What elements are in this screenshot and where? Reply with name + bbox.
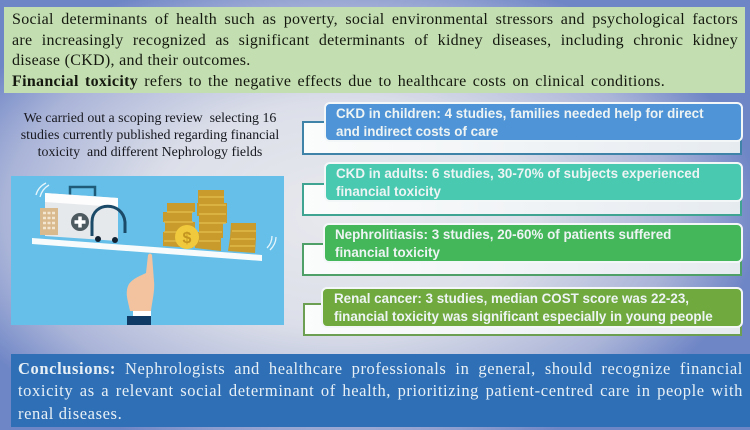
introduction text: are increasingly recognized as significant determinants of kidney diseases, including chronic kidney xyxy=(12,32,738,49)
finding: Renal cancer: Renal cancer: 3 studies, median COST score was 22-23, xyxy=(334,291,689,306)
finding: Renal cancer xyxy=(303,287,743,336)
finding: Renal cancer: financial toxicity was significant especially in young people xyxy=(334,309,713,324)
text: scoping review: toxicity and different Nephrology fields xyxy=(38,145,262,160)
text: scoping review: We carried out a scoping review selecting 16 xyxy=(24,111,276,126)
introduction text: Social determinants of health such as poverty, social environmental stressors and psychological factors xyxy=(12,11,738,28)
icon: coin stacks: $ xyxy=(183,230,192,247)
icon: seesaw plank xyxy=(32,238,262,261)
panel: findings xyxy=(302,102,743,336)
illustration: balance of medical kit and coins xyxy=(11,176,284,325)
text: scoping review: studies currently published regarding financial xyxy=(21,128,279,143)
introduction text: disease (CKD), and their outcomes. xyxy=(12,52,251,69)
text: scoping review xyxy=(21,111,279,160)
finding: Nephrolitiasis xyxy=(302,223,743,276)
conclusions text: renal diseases. xyxy=(18,404,122,423)
introduction text xyxy=(12,11,738,90)
finding: CKD in adults xyxy=(302,162,743,216)
conclusions text: Conclusions: Nephrologists and healthcare professionals in general, should recognize financial xyxy=(18,359,743,378)
icon: coin stacks xyxy=(163,190,276,253)
finding: CKD in children xyxy=(302,102,743,155)
conclusions text xyxy=(18,359,743,423)
finding: Nephrolitiasis: Nephrolitiasis: 3 studies, 20-60% of patients suffered xyxy=(335,227,671,242)
finding: CKD in adults: CKD in adults: 6 studies, 30-70% of subjects experienced xyxy=(336,166,700,181)
introduction text: Financial toxicity refers to the negative effects due to healthcare costs on clinical conditions. xyxy=(12,73,665,90)
panel: conclusions xyxy=(11,354,750,427)
panel: introduction xyxy=(4,7,745,93)
finding: CKD in children: CKD in children: 4 studies, families needed help for direct xyxy=(336,106,704,121)
finding: CKD in adults: financial toxicity xyxy=(336,184,441,199)
finding: Nephrolitiasis: financial toxicity xyxy=(335,245,440,260)
icon: hand xyxy=(127,254,154,325)
icon: medical kit xyxy=(36,183,125,243)
conclusions text: toxicity as a relevant social determinant of health, prioritizing patient-centred care in people with xyxy=(18,381,743,400)
finding: CKD in children: and indirect costs of care xyxy=(336,124,498,139)
